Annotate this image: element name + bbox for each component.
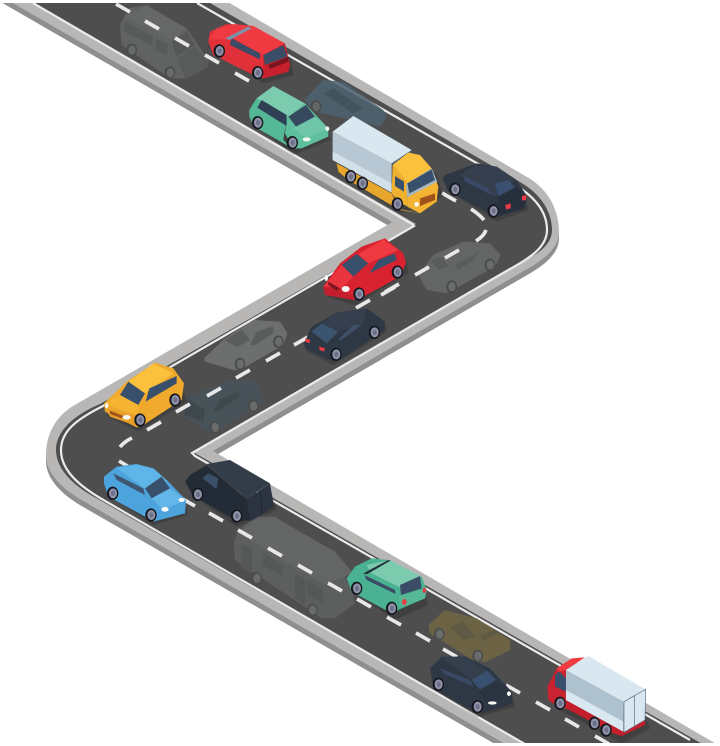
lane dashes xyxy=(116,4,609,744)
car: black sedan bottom xyxy=(430,657,515,717)
ghost vehicle: dark slate car xyxy=(183,380,263,434)
truck: yellow cab with light box xyxy=(333,116,443,213)
car: green minivan top xyxy=(249,86,330,155)
ghost vehicle: grey coupe at right bend xyxy=(418,242,501,293)
car: red hatchback top xyxy=(208,24,293,83)
car: yellow minivan left xyxy=(104,363,187,432)
car: red hatchback middle xyxy=(323,238,408,305)
ghost vehicle: olive car xyxy=(428,610,511,662)
ghost vehicle: bus xyxy=(234,517,355,618)
truck: red cab with light box xyxy=(547,656,650,743)
car: blue sedan left xyxy=(104,464,188,525)
car: green minivan bottom xyxy=(347,558,428,620)
ghost vehicle: grey van xyxy=(120,5,208,79)
road barrier shadow side xyxy=(2,3,559,743)
ghost vehicle: blue-grey car behind truck xyxy=(304,80,387,127)
car: black coupe middle xyxy=(304,308,387,365)
van: black xyxy=(185,460,277,527)
car: black sedan at right bend xyxy=(443,163,528,222)
ghost vehicle: grey hatchback xyxy=(204,320,287,370)
